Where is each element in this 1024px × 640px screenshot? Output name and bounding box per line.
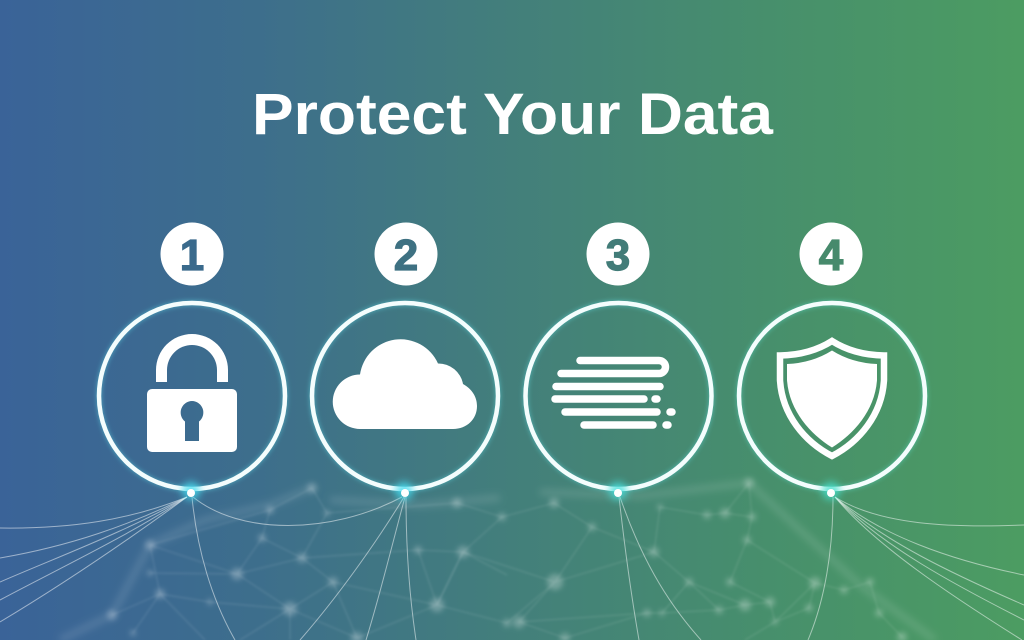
icon: padlock	[147, 334, 237, 452]
ring 2	[312, 303, 498, 489]
number badge 2	[374, 222, 438, 286]
icon: shield	[780, 341, 884, 456]
icon: data lines	[555, 360, 672, 425]
number badge 3	[586, 222, 650, 286]
glow node 3	[609, 482, 627, 500]
ring 4	[739, 303, 925, 489]
number badge 1: 1	[180, 231, 204, 280]
title: Protect Your Data	[252, 82, 774, 147]
glow node 1	[182, 482, 200, 500]
ring 3	[526, 303, 712, 489]
network mesh globe	[60, 478, 935, 640]
step 1: lock	[99, 222, 285, 500]
step 2: cloud	[312, 222, 498, 500]
connector lines	[0, 497, 1024, 640]
number badge 4: 4	[819, 231, 844, 280]
number badge 3: 3	[606, 231, 630, 280]
step 3: text lines	[526, 222, 712, 500]
icon: cloud	[333, 339, 477, 429]
number badge 1	[160, 222, 224, 286]
number badge 4	[800, 222, 862, 286]
ring 1	[99, 303, 285, 489]
number badge 2: 2	[394, 231, 418, 280]
glow node 4	[822, 482, 840, 500]
step 4: shield	[739, 222, 925, 500]
glow node 2	[395, 482, 413, 500]
